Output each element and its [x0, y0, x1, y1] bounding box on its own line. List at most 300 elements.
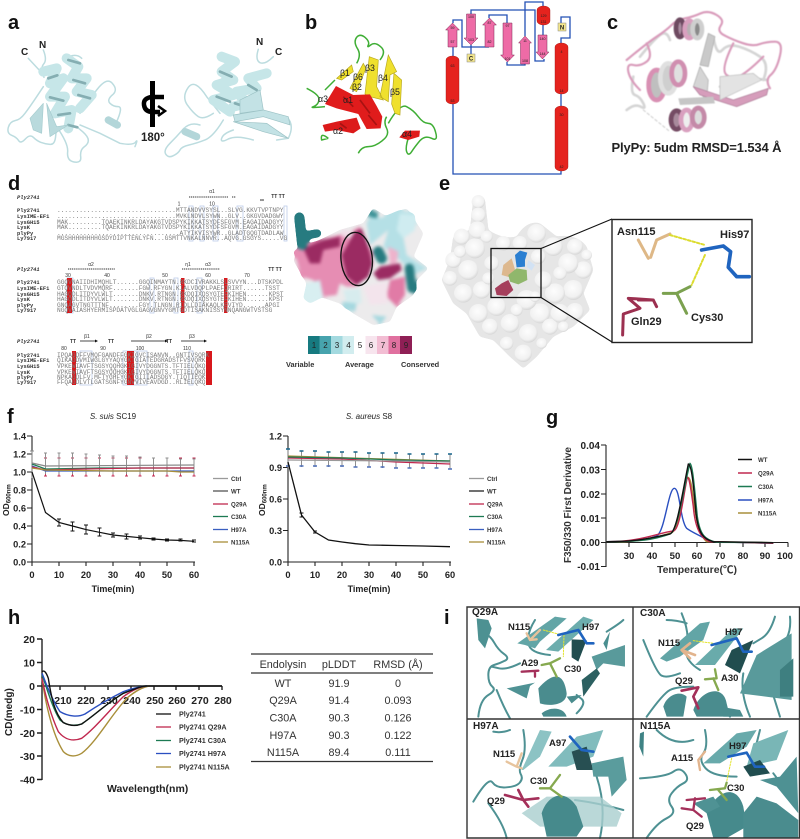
axis tick labels: 0.4 — [13, 522, 27, 532]
CD tick labels: -40 — [20, 774, 35, 786]
tick labels: 0.00 — [581, 538, 600, 549]
tick labels: -0.01 — [577, 562, 600, 573]
inset: catalytic residues: His97 — [720, 229, 749, 241]
block 1: LysIME-EF1 — [17, 214, 49, 220]
conservation scale legend: 6 — [369, 341, 374, 350]
panel h: circular dichroism and table: 250 — [146, 695, 164, 707]
label c: c — [607, 12, 618, 34]
residue numbers: 82 — [488, 40, 492, 44]
N terminus label left: N — [39, 40, 46, 51]
Q29A labels: N115 — [508, 622, 531, 633]
zoom box on surface — [491, 248, 541, 298]
residue numbers: 11 — [523, 39, 527, 43]
secondary structure labels: β2 — [352, 82, 362, 92]
axis tick labels: 0.0 — [13, 558, 26, 568]
residue numbers: 59 — [450, 26, 454, 30]
N115A cartoon — [639, 729, 798, 839]
block 2 — [17, 262, 284, 314]
axis tick labels: 0.6 — [269, 494, 282, 504]
left protein ribbon — [8, 50, 137, 162]
label e: e — [439, 173, 450, 195]
panel g: thermal melt first derivative: 80 — [738, 551, 748, 562]
N115A labels: N115A — [640, 721, 671, 732]
CD tick labels: 10 — [23, 658, 35, 670]
panel h: circular dichroism and table — [4, 607, 433, 795]
block 2: 30 — [65, 273, 71, 279]
block 1: Ply2741 — [17, 208, 40, 214]
conservation scale legend: 1 — [312, 341, 317, 350]
panel a: protein structure two views — [8, 12, 291, 162]
CD tick labels: -10 — [20, 704, 35, 716]
conservation scale legend: 3 — [335, 341, 340, 350]
conservation scale legend: Average — [345, 360, 374, 369]
table of pLDDT and RMSD: Q29A — [269, 695, 298, 707]
label b: b — [305, 12, 317, 34]
block 2: η1 — [185, 262, 191, 268]
block 3: 110 — [183, 346, 191, 352]
axis tick labels — [13, 432, 27, 568]
C30A labels: C30A — [640, 608, 666, 619]
conservation scale legend: Variable — [286, 360, 314, 369]
block 1: MAK.........TQAEKINKRLDAYAKGTVDSPYKIKKATSYDFSFGVM.EAGAIDADGYY — [57, 219, 284, 226]
Q29A labels: H97 — [582, 622, 599, 633]
inset: catalytic residues — [612, 220, 752, 342]
panel h: circular dichroism and table: 260 — [168, 695, 186, 707]
Q29A labels: A29 — [521, 658, 538, 669]
table of pLDDT and RMSD: 0 — [395, 678, 401, 690]
block 2: 60 — [205, 273, 211, 279]
block 3: TT — [166, 339, 172, 345]
Q29A labels: C30 — [564, 664, 581, 675]
WT curve — [288, 462, 450, 547]
alignment highlights — [67, 206, 287, 385]
tick labels — [577, 441, 600, 573]
block 1: LysGH15 — [17, 220, 40, 226]
H97A labels — [473, 721, 566, 807]
table of pLDDT and RMSD: pLDDT — [322, 659, 357, 671]
error bars — [288, 449, 450, 469]
residue numbers: 108 — [522, 59, 528, 63]
block 1: 10 — [209, 202, 215, 208]
table of pLDDT and RMSD: H97A — [269, 730, 297, 742]
secondary structure labels: α3 — [318, 94, 328, 104]
chart: S. suis SC19: 20 — [81, 570, 91, 580]
panel h: circular dichroism and table: 280 — [214, 695, 232, 707]
block 2: TT TT — [268, 267, 282, 273]
residue numbers — [450, 14, 564, 169]
legend: WT — [487, 488, 497, 496]
C30A labels: H97 — [725, 627, 742, 638]
H97A cartoon — [472, 729, 627, 839]
tick labels: 0.02 — [581, 490, 600, 501]
axes — [601, 445, 788, 567]
axis tick labels: 0.9 — [269, 463, 282, 473]
legend — [213, 476, 250, 546]
y axis title: 600nm — [6, 484, 12, 503]
residue numbers: 140 — [540, 37, 546, 41]
block 1: ................................MVKLNDVLSYWN..GLV..GKGVDADGWY — [57, 213, 284, 220]
block 1 — [17, 189, 287, 242]
legend: N115A — [487, 540, 506, 546]
axis tick labels: 0.3 — [269, 526, 282, 536]
H97A labels: H97A — [473, 721, 499, 732]
block 3: VPKEWIAVFTSGSYQQHGKIGIVYDGGNTS.TFTIELQKQ — [57, 363, 206, 370]
CD tick labels: 0 — [29, 681, 35, 693]
CD tick labels — [20, 634, 35, 786]
H97A labels: C30 — [530, 776, 547, 787]
axis tick labels: 0.2 — [13, 540, 26, 550]
label d: d — [8, 173, 20, 195]
topology diagram: N — [560, 26, 564, 32]
legend: WT — [758, 457, 768, 464]
legend: C30A — [758, 484, 774, 491]
block 1: ................................MTTANDVVSYSL..SLVG.KKVTVPTNPY — [57, 207, 284, 214]
table of pLDDT and RMSD: 0.126 — [384, 712, 412, 724]
table of pLDDT and RMSD: 0.111 — [385, 747, 411, 759]
C30A cartoon — [642, 612, 794, 718]
chart title: S. aureus S8 — [346, 412, 393, 421]
error bars upper group — [44, 458, 196, 476]
conservation surface — [293, 208, 428, 325]
chart: S. aureus S8: 40 — [391, 570, 401, 580]
tick labels: 0.03 — [581, 466, 600, 476]
panel h: circular dichroism and table: 240 — [123, 695, 141, 707]
table of pLDDT and RMSD — [251, 654, 433, 762]
rotation arrow icon — [144, 81, 165, 127]
error bars control — [30, 451, 196, 478]
block 2: LysK — [17, 297, 31, 303]
C terminus label right: C — [275, 47, 282, 58]
residue numbers: 63 — [450, 64, 454, 68]
chart: S. aureus S8: 30 — [364, 570, 374, 580]
label i: i — [444, 607, 450, 629]
tick labels: 0.04 — [581, 441, 600, 452]
residue numbers: 103 — [468, 38, 474, 42]
CD legend: Ply2741 Q29A — [179, 722, 227, 732]
table of pLDDT and RMSD: 91.9 — [328, 678, 350, 690]
legend — [738, 457, 777, 518]
chart: S. aureus S8: 60 — [445, 570, 455, 580]
panel c: structural superposition — [607, 12, 782, 155]
block 2: NGQVAIASHYERMISPDATVGLGAGVGNVYGMTGDTISAKNISSYNNQANGWTVSTSG — [57, 307, 273, 314]
table of pLDDT and RMSD: 91.4 — [328, 695, 350, 707]
N115A labels: H97 — [729, 741, 746, 752]
legend: Q29A — [758, 470, 775, 478]
chart: S. suis SC19: 0 — [29, 570, 35, 580]
secondary structure labels: β1 — [340, 68, 350, 78]
label f: f — [7, 406, 14, 428]
residue numbers: 101 — [504, 57, 510, 61]
block 3: FFQAGDLVTLGATSGNFYGNVVIVEAVDGD..RLIELQKQ — [57, 379, 206, 386]
block 3: VPKEWIAVFTSGSYQQHGKIGIVYDGGNTS.TFTIELQKQ — [57, 369, 206, 376]
C30A labels: N115 — [658, 638, 681, 649]
CD legend — [156, 710, 230, 772]
panel h: circular dichroism and table: 220 — [77, 695, 95, 707]
block 2: α2 — [88, 262, 94, 268]
strands — [446, 14, 549, 64]
panel i: mutant active sites — [444, 607, 800, 838]
N115A labels: A115 — [671, 753, 694, 764]
block 2: 40 — [104, 273, 110, 279]
secondary structure labels — [318, 63, 412, 139]
residue numbers: 87 — [488, 21, 492, 25]
axis tick labels: 0.6 — [13, 504, 26, 514]
mutant curves — [288, 456, 450, 464]
chart: S. suis SC19 — [1, 412, 250, 594]
legend — [469, 476, 506, 546]
topology diagram — [446, 2, 570, 174]
block 3: Ply2741 — [17, 339, 40, 345]
CD legend: Ply2741 — [179, 710, 206, 718]
legend: Ctrl — [487, 476, 498, 483]
label a: a — [8, 12, 20, 34]
x axis title: Time(min) — [92, 584, 134, 594]
table of pLDDT and RMSD: WT — [275, 678, 292, 690]
table of pLDDT and RMSD: 0.093 — [384, 695, 412, 707]
secondary structure labels: α4 — [402, 129, 412, 139]
panel b: secondary structure and topology — [305, 2, 570, 174]
chart: S. aureus S8: 20 — [337, 570, 347, 580]
legend: N115A — [758, 510, 777, 518]
legend: H97A — [231, 527, 247, 534]
block 2: Ly7917 — [17, 308, 36, 314]
panel g: thermal melt first derivative: 40 — [647, 551, 657, 562]
axis tick labels: 0.8 — [13, 486, 26, 496]
H97A labels: A97 — [549, 738, 566, 749]
residue numbers: 129 — [540, 14, 546, 18]
N115A labels — [640, 721, 746, 832]
y axis title: F350/330 First Derivative — [563, 447, 574, 563]
conservation scale legend — [286, 336, 440, 369]
legend: Q29A — [231, 502, 248, 508]
block 1: plyPy — [17, 231, 34, 237]
block 3 — [17, 334, 210, 386]
block 3: plyPy — [17, 375, 34, 381]
panel g: thermal melt first derivative: 50 — [670, 551, 680, 562]
x axis title: Time(min) — [348, 584, 390, 594]
block 1: 1 — [178, 202, 181, 208]
block 3: LysIME-EF1 — [17, 358, 49, 364]
panel g: thermal melt first derivative: 100 — [777, 551, 793, 562]
panel g: thermal melt first derivative — [546, 407, 793, 576]
CD legend: Ply2741 H97A — [179, 749, 226, 758]
panel f: lysis curves — [1, 406, 506, 594]
CD axes — [37, 639, 222, 780]
topology diagram: C — [469, 56, 474, 62]
mutant curves — [32, 463, 194, 472]
chart: S. aureus S8 — [257, 412, 506, 594]
N115A labels: Q29 — [686, 821, 704, 832]
chart: S. suis SC19: 50 — [162, 570, 172, 580]
table of pLDDT and RMSD: RMSD (Å) — [373, 658, 423, 671]
residue numbers: 14 — [560, 89, 564, 93]
CD curves — [42, 671, 222, 756]
residue numbers: 100 — [468, 15, 474, 19]
table of pLDDT and RMSD: 0.122 — [384, 730, 412, 742]
3D cartoon coloured by secondary structure — [307, 35, 436, 154]
panel e: active site on surface — [439, 173, 752, 368]
residue numbers: 42 — [560, 165, 564, 169]
y axis title: OD — [257, 503, 267, 516]
inset: catalytic residues: Asn115 — [617, 226, 656, 238]
residue numbers: 97 — [506, 24, 510, 28]
RMSD caption: PlyPy: 5udm RMSD=1.534 Å — [612, 140, 782, 155]
block 3: TT — [108, 339, 114, 345]
block 3: NPKAGDLFV.MFTYGHFYGKTGIIIADSDGY.TIQTIEQK — [57, 374, 206, 381]
conservation scale legend: 4 — [346, 341, 351, 350]
block 1: LysK — [17, 225, 31, 231]
conservation scale legend: 5 — [358, 341, 363, 350]
block 2: 70 — [244, 273, 250, 279]
block 2: HAGQDLITDYVLWLT.......DNKV.RTNGN.RKDQIXQSYGTEFKIHEN......KPST — [57, 291, 284, 298]
axis tick labels: 1.2 — [269, 432, 282, 442]
block 2: GNQAGVTNGTTTNF........FGY.TLNGN.RIDLLDIAKAQLKEVIYD......APGI — [57, 302, 280, 309]
table of pLDDT and RMSD: Endolysin — [260, 659, 306, 671]
panel g: thermal melt first derivative: 70 — [715, 551, 725, 562]
CD x axis title: Wavelength(nm) — [107, 783, 188, 795]
panel d: alignment and conservation — [8, 173, 440, 386]
CD tick labels: -20 — [20, 728, 35, 740]
block 1: α1 — [209, 189, 215, 195]
C30A labels: Q29 — [675, 676, 693, 687]
panel frame — [467, 607, 800, 838]
secondary structure labels: α1 — [343, 95, 353, 105]
block 1: ** — [260, 199, 264, 205]
axes — [27, 436, 195, 566]
panel h: circular dichroism and table: 210 — [54, 695, 72, 707]
block 1: Ly7917 — [17, 236, 36, 242]
legend: Ctrl — [231, 476, 242, 483]
legend: N115A — [231, 540, 250, 546]
H97A labels: N115 — [493, 749, 516, 760]
table of pLDDT and RMSD: C30A — [269, 712, 297, 724]
block 1: TT TT — [271, 194, 285, 200]
block 3: 90 — [100, 346, 106, 352]
CD tick labels: -30 — [20, 751, 35, 763]
H97A labels: Q29 — [487, 796, 505, 807]
table of pLDDT and RMSD: N115A — [267, 747, 300, 759]
secondary structure labels: β4 — [378, 73, 388, 83]
secondary structure labels: β6 — [353, 72, 363, 82]
sub-panels artwork — [473, 613, 798, 838]
y axis title: OD — [1, 503, 11, 516]
Q29A labels — [472, 607, 599, 675]
panel g: thermal melt first derivative: 60 — [692, 551, 702, 562]
block 2: LysGH15 — [17, 292, 40, 298]
block 2: Ply2741 — [17, 280, 40, 286]
right protein ribbon — [165, 49, 291, 157]
chart: S. suis SC19: 40 — [135, 570, 145, 580]
block 3: LysK — [17, 370, 31, 376]
sequence alignment — [17, 189, 287, 386]
residues on surface — [495, 251, 535, 296]
block 2: HAGQDLITDYVLWLT.......DNKV.RTNGN.RKDQIXQSYGTEFKIHEN......KPST — [57, 296, 284, 303]
chart: S. aureus S8: 50 — [418, 570, 428, 580]
block 3: β3 — [189, 334, 195, 340]
block 3: 80 — [61, 346, 67, 352]
N115A labels: C30 — [727, 783, 744, 794]
block 1: .................................ATYIKVISYWR..GLADTGQGTDADLAW — [57, 230, 284, 237]
x axis title: Temperature(℃) — [657, 564, 737, 576]
table of pLDDT and RMSD: 90.3 — [328, 712, 350, 724]
legend: H97A — [758, 498, 774, 504]
axis tick labels — [269, 432, 282, 568]
residue numbers: 131 — [540, 20, 546, 24]
block 2: LysIME-EF1 — [17, 286, 49, 292]
inset: catalytic residues: Gln29 — [631, 316, 662, 328]
block 2: 50 — [162, 273, 168, 279]
chart: S. suis SC19: 60 — [189, 570, 199, 580]
conservation scale legend: 8 — [392, 341, 397, 350]
label g: g — [546, 407, 558, 429]
legend: WT — [231, 488, 241, 496]
axis tick labels: 1.0 — [13, 468, 26, 478]
Q29A cartoon — [476, 616, 625, 718]
C30A labels: A30 — [721, 673, 738, 684]
block 3: QIKADDVMIWGLGYYAQYGKTGIATEDGRADSTFVSVQRK — [57, 357, 206, 364]
block 3: IPQAGDFFVMQFGANDFFGKIGVCISANVN..GNTIVSQRK — [57, 352, 210, 359]
y axis title: 600nm — [262, 484, 268, 503]
axis tick labels: 0.0 — [269, 558, 282, 568]
conservation scale legend: 2 — [323, 341, 328, 350]
block 3: TT — [70, 339, 76, 345]
residue numbers: 144 — [540, 52, 546, 56]
chart: S. suis SC19: 10 — [54, 570, 64, 580]
residue numbers: 30 — [560, 113, 564, 117]
WT curve with error bars — [32, 472, 196, 542]
conservation scale legend: 7 — [381, 341, 386, 350]
block 1: Ply2741 — [17, 195, 40, 201]
residue numbers: 53 — [450, 99, 454, 103]
white molecular surface — [442, 195, 593, 368]
terminus boxes — [467, 23, 566, 62]
conservation scale legend: 9 — [404, 341, 409, 350]
C terminus label left: C — [21, 47, 28, 58]
residue numbers: 4 — [560, 50, 562, 54]
panel g: thermal melt first derivative: 90 — [760, 551, 770, 562]
C30A labels — [640, 608, 742, 687]
connecting lines — [453, 2, 570, 174]
zoom connector lines — [541, 219, 612, 342]
CD legend: Ply2741 N115A — [179, 762, 230, 772]
residue numbers: 57 — [450, 40, 454, 44]
legend: Q29A — [487, 502, 504, 508]
table of pLDDT and RMSD: 90.3 — [328, 730, 350, 742]
block 3: LysGH15 — [17, 364, 40, 370]
panel g: thermal melt first derivative: 30 — [624, 551, 634, 562]
block 1: MAK.........TQAEKINKRLDAYAKGTVDSPYKIKKATSYDFSFGVM.EAGAIDADGYY — [57, 224, 284, 231]
superposed ribbons — [627, 12, 781, 132]
secondary structure labels: α2 — [333, 126, 343, 136]
block 3: Ply2741 — [17, 353, 40, 359]
block 3: β2 — [146, 334, 152, 340]
conservation scale legend: Conserved — [401, 360, 440, 369]
chart: S. aureus S8: 0 — [285, 570, 291, 580]
axis tick labels: 1.4 — [13, 432, 27, 442]
CD tick labels: 20 — [23, 634, 35, 646]
inset: catalytic residues: Cys30 — [691, 312, 723, 324]
panel h: circular dichroism and table: 270 — [191, 695, 209, 707]
melt curves — [607, 463, 773, 543]
secondary structure labels: β5 — [390, 87, 400, 97]
rotation angle: 180° — [141, 132, 165, 144]
panel h: circular dichroism and table: 230 — [100, 695, 118, 707]
secondary structure labels: β3 — [365, 63, 375, 73]
block 3: β1 — [84, 334, 90, 340]
chart: S. suis SC19: 30 — [108, 570, 118, 580]
N terminus label right: N — [256, 37, 263, 48]
table of pLDDT and RMSD: 89.4 — [328, 747, 350, 759]
